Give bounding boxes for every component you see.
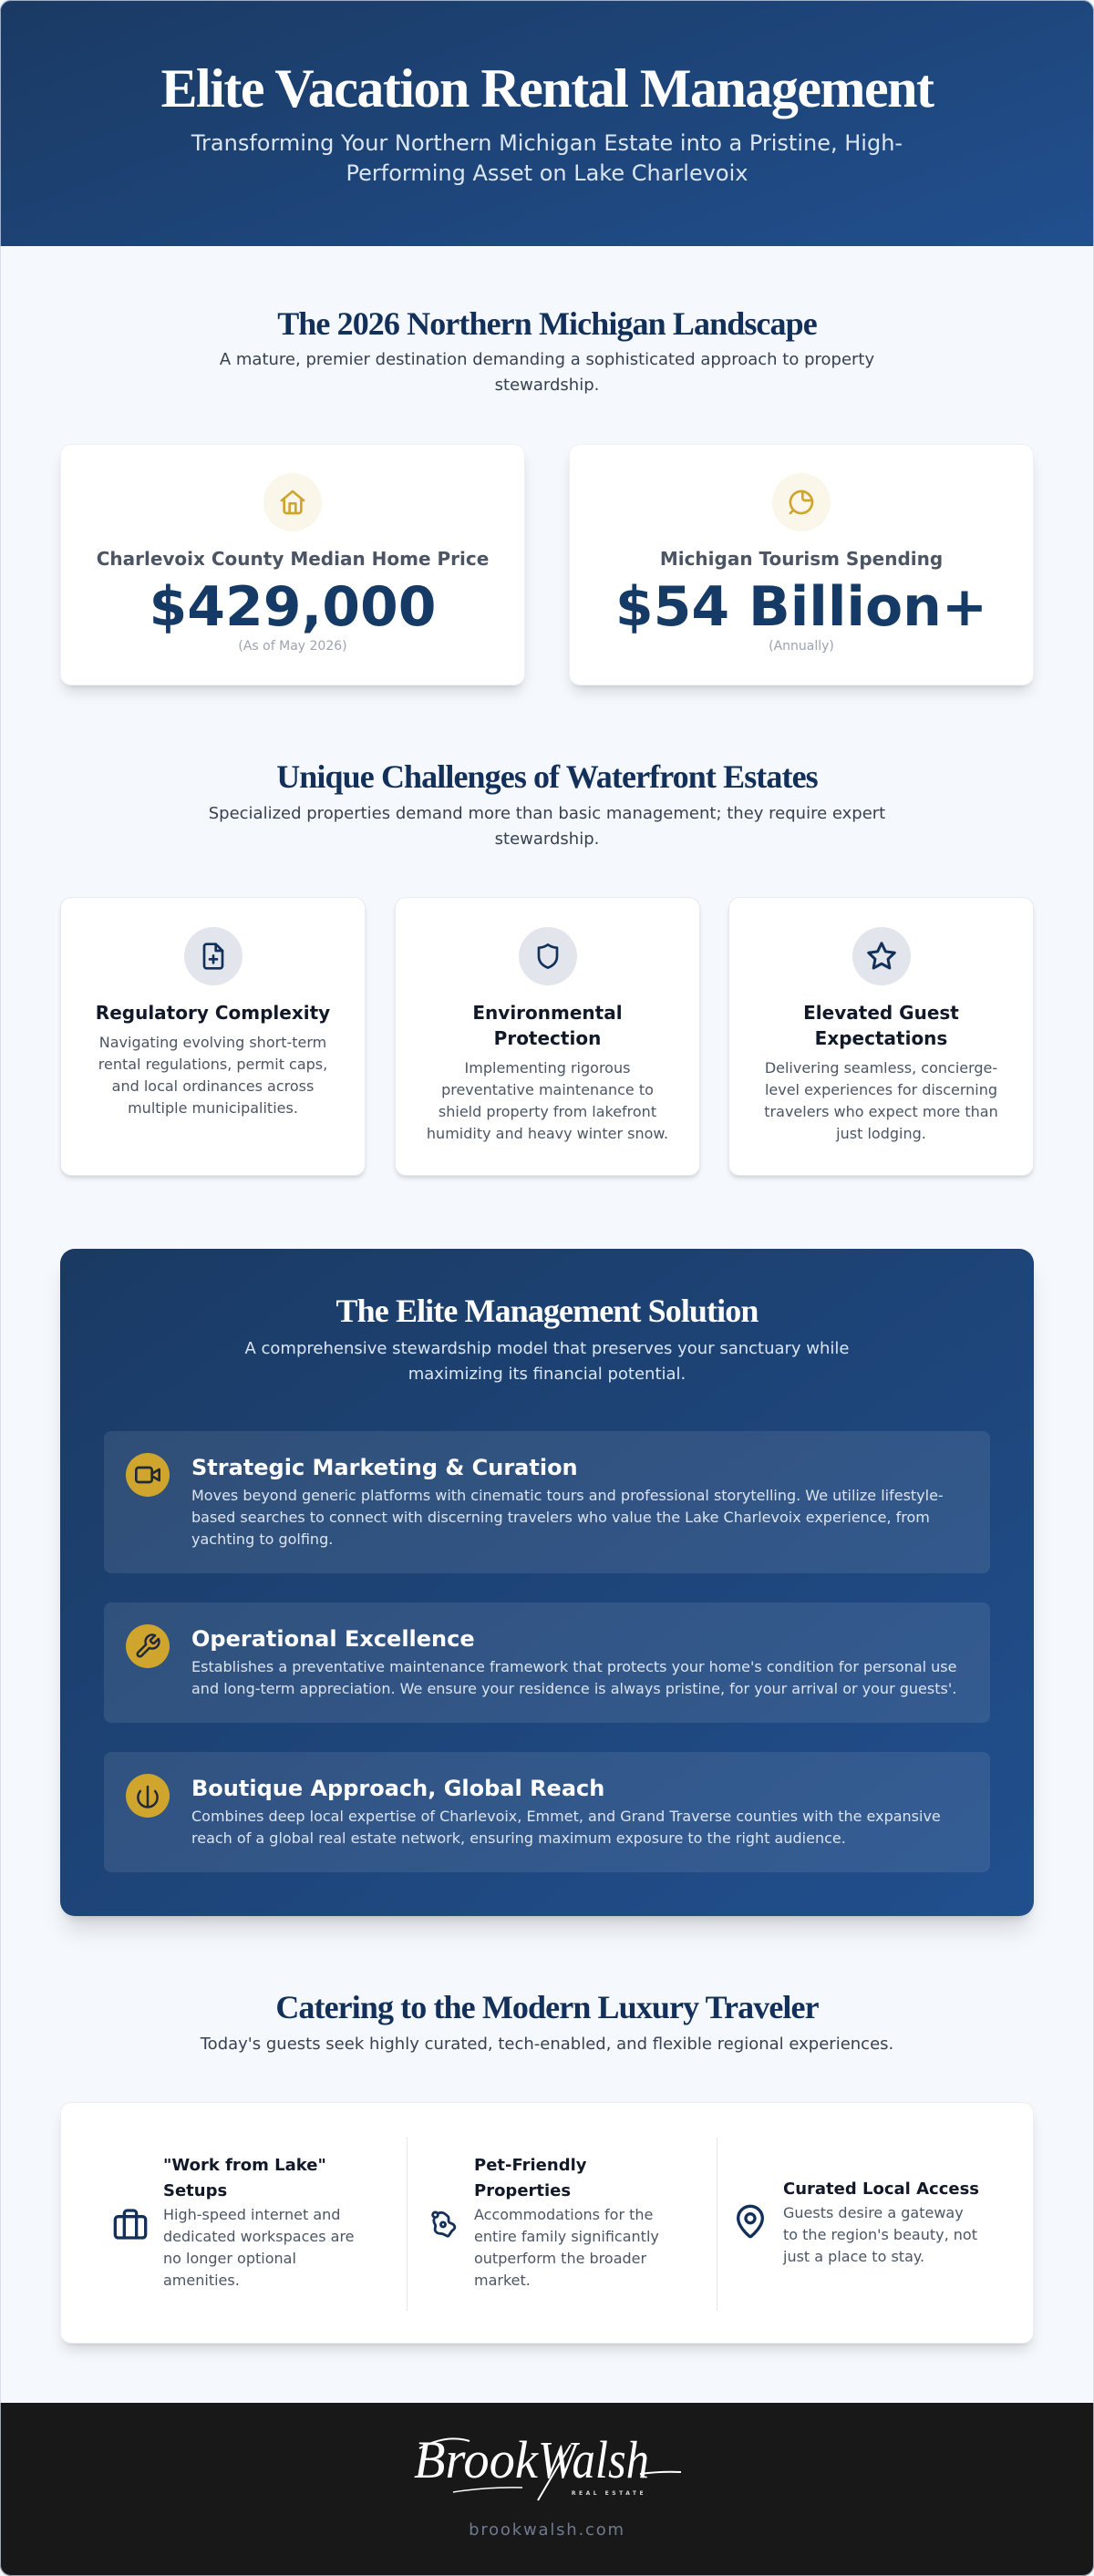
feature title: Curated Local Access xyxy=(783,2179,979,2199)
stat label: Michigan Tourism Spending xyxy=(660,548,943,570)
feature description: entire family significantly xyxy=(474,2228,659,2245)
icon: wrench xyxy=(126,1624,170,1668)
card description xyxy=(427,1059,668,1142)
section intro: landscape xyxy=(220,350,874,395)
logo: Brook Walsh signature: Brook xyxy=(414,2430,539,2489)
feature description: market. xyxy=(474,2272,531,2289)
feature: curated local access xyxy=(737,2179,979,2265)
section intro: landscape: stewardship. xyxy=(495,376,599,395)
panel intro xyxy=(244,1339,850,1384)
item title: Strategic Marketing & Curation xyxy=(191,1455,578,1480)
icon: document plus xyxy=(184,927,243,985)
feature description: High-speed internet and xyxy=(163,2206,340,2223)
icon: map pin xyxy=(737,2204,764,2239)
item title: Boutique Approach, Global Reach xyxy=(191,1776,604,1801)
stat label: Charlevoix County Median Home Price xyxy=(97,548,489,570)
card description xyxy=(764,1059,998,1142)
feature title xyxy=(474,2156,587,2200)
stat card: median home price xyxy=(60,444,525,685)
feature description xyxy=(474,2206,659,2289)
card title xyxy=(803,1002,959,1049)
card title: Regulatory Complexity xyxy=(96,1002,330,1024)
feature description xyxy=(163,2206,355,2289)
icon: paw xyxy=(431,2211,456,2238)
icon: anchor xyxy=(126,1774,170,1818)
section heading: luxury traveler: Catering to the Modern Luxury Traveler xyxy=(275,1989,819,2025)
card description: just lodging. xyxy=(836,1125,926,1142)
feature description: outperform the broader xyxy=(474,2250,646,2267)
panel intro: maximizing its financial potential. xyxy=(408,1365,686,1384)
card title: Protection xyxy=(494,1027,601,1049)
stat card: tourism spending xyxy=(569,444,1034,685)
title: Elite Vacation Rental Management xyxy=(161,58,933,118)
section heading: landscape: The 2026 Northern Michigan Landscape xyxy=(277,305,817,342)
section intro: luxury traveler: Today's guests seek highly curated, tech-enabled, and flexible regional experiences. xyxy=(201,2035,893,2054)
feature: work from lake xyxy=(113,2156,355,2289)
panel: traveler features xyxy=(60,2102,1034,2344)
panel intro: A comprehensive stewardship model that preserves your sanctuary while xyxy=(244,1339,850,1358)
card description: and local ordinances across xyxy=(112,1077,314,1095)
item title: Operational Excellence xyxy=(191,1626,475,1652)
panel: elite management solution xyxy=(60,1249,1034,1916)
item description: Combines deep local expertise of Charlevoix, Emmet, and Grand Traverse counties with the expansive xyxy=(191,1808,941,1825)
icon: shield xyxy=(519,927,577,985)
item description xyxy=(191,1808,941,1847)
feature description: Accommodations for the xyxy=(474,2206,653,2223)
card title: Expectations xyxy=(815,1027,947,1049)
item description: yachting to golfing. xyxy=(191,1530,333,1548)
icon: star xyxy=(852,927,911,985)
card description: Navigating evolving short-term xyxy=(99,1034,326,1051)
stat note: (As of May 2026) xyxy=(238,639,347,654)
item description: reach of a global real estate network, ensuring maximum exposure to the right audience. xyxy=(191,1829,846,1847)
section intro: challenges xyxy=(209,804,885,849)
feature title xyxy=(163,2156,326,2200)
solution item: operations xyxy=(104,1602,990,1723)
feature title: Setups xyxy=(163,2181,227,2200)
feature description xyxy=(782,2204,977,2265)
website: brookwalsh.com xyxy=(469,2520,625,2540)
item description: and long-term appreciation. We ensure your residence is always pristine, for your arrival or your guests'. xyxy=(191,1680,956,1697)
item description xyxy=(191,1487,944,1548)
stat value: $54 Billion+ xyxy=(615,575,987,639)
solution item: marketing xyxy=(104,1431,990,1573)
card description: travelers who expect more than xyxy=(764,1103,998,1120)
feature title: Properties xyxy=(474,2181,571,2200)
divider xyxy=(407,2138,408,2311)
section heading: challenges: Unique Challenges of Waterfront Estates xyxy=(276,758,818,795)
card description: Implementing rigorous xyxy=(465,1059,630,1077)
feature title: "Work from Lake" xyxy=(163,2156,326,2175)
subtitle: Performing Asset on Lake Charlevoix xyxy=(346,160,748,186)
challenge card: environmental xyxy=(395,897,700,1176)
item description: Establishes a preventative maintenance framework that protects your home's condition for personal use xyxy=(191,1658,956,1675)
icon: house xyxy=(263,473,322,531)
card description: rental regulations, permit caps, xyxy=(98,1056,327,1073)
feature description: dedicated workspaces are xyxy=(163,2228,355,2245)
icon: pie chart bubble xyxy=(772,473,831,531)
stat value: $429,000 xyxy=(149,575,437,639)
feature description: to the region's beauty, not xyxy=(783,2226,977,2243)
feature: pet friendly xyxy=(431,2156,659,2289)
feature description: Guests desire a gateway xyxy=(783,2204,964,2221)
logo: Brook Walsh signature xyxy=(414,2430,682,2501)
card description: humidity and heavy winter snow. xyxy=(427,1125,668,1142)
card description: Delivering seamless, concierge- xyxy=(765,1059,997,1077)
subtitle: Transforming Your Northern Michigan Estate into a Pristine, High- xyxy=(191,130,903,156)
card title: Environmental xyxy=(472,1002,623,1024)
footer xyxy=(0,2403,1094,2576)
stat note: (Annually) xyxy=(769,639,834,654)
challenge card: regulatory xyxy=(60,897,366,1176)
panel heading: The Elite Management Solution xyxy=(336,1293,758,1329)
section intro: landscape: A mature, premier destination demanding a sophisticated approach to property xyxy=(220,350,874,369)
subtitle xyxy=(191,130,903,186)
card description: preventative maintenance to xyxy=(441,1081,654,1098)
item description xyxy=(191,1658,956,1697)
card description xyxy=(98,1034,327,1117)
item description: based searches to connect with discerning travelers who value the Lake Charlevoix experience, from xyxy=(191,1509,930,1526)
feature title: Pet-Friendly xyxy=(474,2156,586,2175)
logo: Brook Walsh signature: Walsh xyxy=(538,2430,649,2489)
section intro: challenges: Specialized properties demand more than basic management; they require expert xyxy=(209,804,885,823)
card title xyxy=(472,1002,623,1049)
feature description: just a place to stay. xyxy=(783,2248,924,2265)
card title: Elevated Guest xyxy=(803,1002,959,1024)
icon: video camera xyxy=(126,1453,170,1497)
header banner xyxy=(0,0,1094,246)
challenge card: guest expectations xyxy=(728,897,1034,1176)
section intro: challenges: stewardship. xyxy=(495,829,599,849)
card description: multiple municipalities. xyxy=(128,1099,298,1117)
solution item: boutique xyxy=(104,1752,990,1872)
icon: briefcase xyxy=(113,2209,148,2240)
feature description: no longer optional xyxy=(163,2250,296,2267)
feature description: amenities. xyxy=(163,2272,240,2289)
logo: Brook Walsh signature: REAL ESTATE xyxy=(572,2490,646,2497)
card description: level experiences for discerning xyxy=(765,1081,997,1098)
card description: shield property from lakefront xyxy=(439,1103,656,1120)
item description: Moves beyond generic platforms with cinematic tours and professional storytelling. We utilize lifestyle- xyxy=(191,1487,944,1504)
